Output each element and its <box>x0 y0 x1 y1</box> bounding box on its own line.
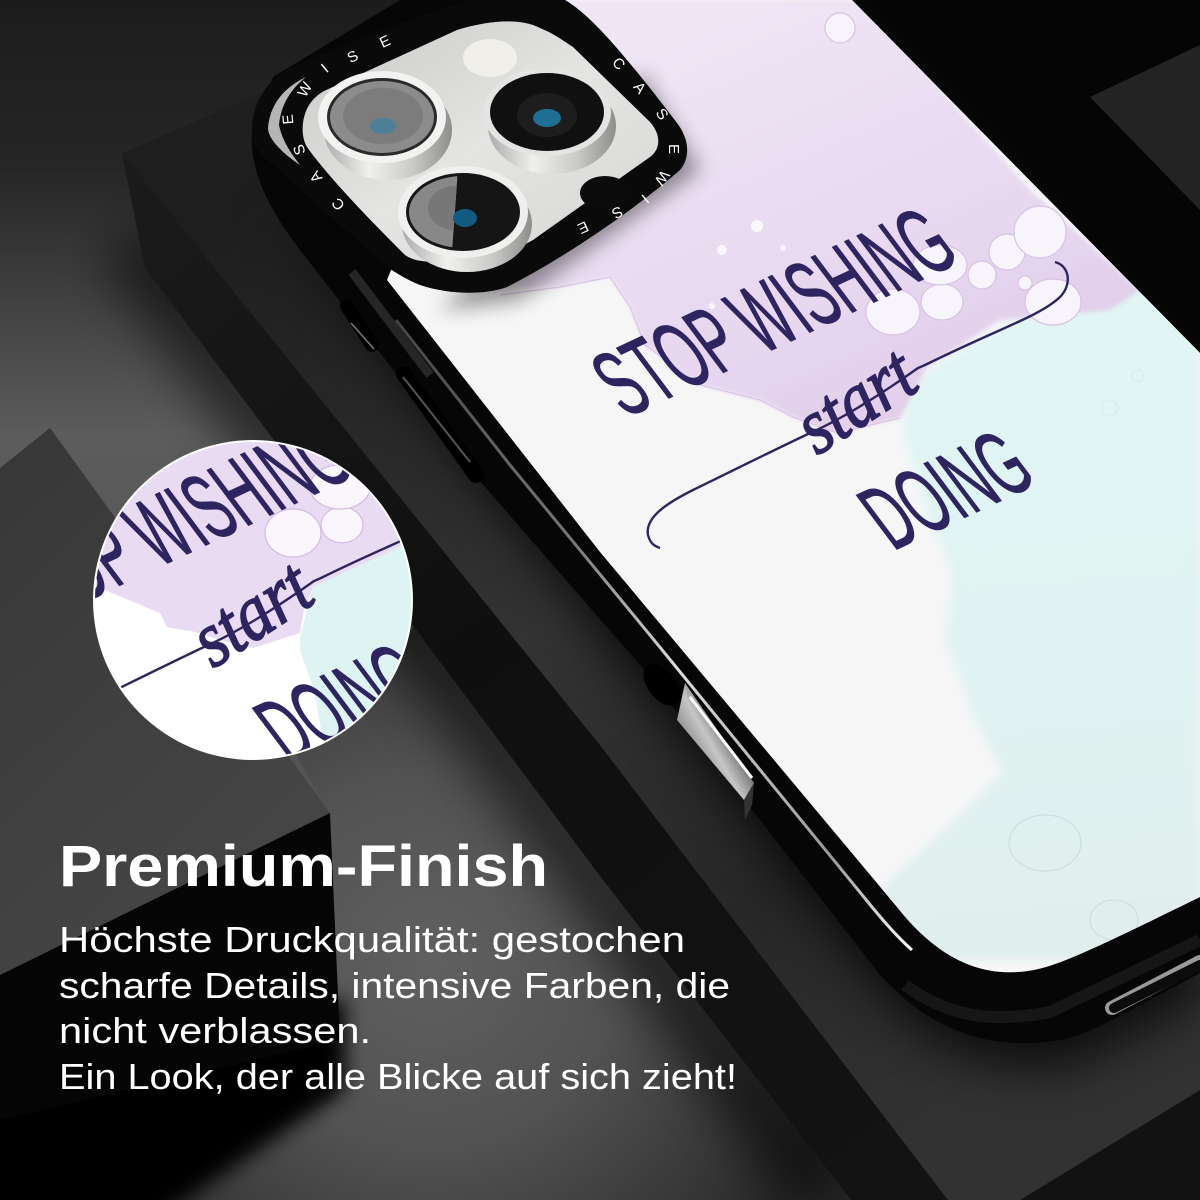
printed text: start: start <box>779 328 933 471</box>
brand lettering: left side: A <box>306 168 326 186</box>
lilac watercolor area <box>480 0 1140 433</box>
small white specks <box>709 220 786 309</box>
brand lettering: right side: S <box>652 105 672 123</box>
brand lettering: left side: W <box>294 79 316 100</box>
white paint bubbles <box>825 13 1081 335</box>
background: upper-right dark area <box>700 0 1200 420</box>
brand lettering: right side: C <box>608 54 628 74</box>
magnified bubbles <box>265 465 370 557</box>
glare on ring <box>268 77 306 165</box>
magnifier detail circle <box>93 440 413 760</box>
microphone hole <box>580 176 630 210</box>
background: lower-left block soft shadow <box>0 1000 345 1200</box>
upper side rim <box>352 272 430 375</box>
brand lettering: left side: I <box>318 61 332 76</box>
printed text: dOing: DOING <box>840 411 1052 568</box>
glossy edge highlight <box>396 320 912 950</box>
phone case body <box>252 0 1200 1043</box>
background: main block side face <box>122 153 948 1200</box>
title: Premium-Finish <box>59 834 548 899</box>
camera ring outer <box>252 0 687 293</box>
background: upper-right block <box>1090 45 1200 210</box>
printed swash line <box>648 262 1068 548</box>
faint water rings <box>1009 370 1144 940</box>
body inner rim <box>905 940 1200 1017</box>
background: shadow along main block <box>130 240 830 1200</box>
lilac wash outline <box>500 277 900 433</box>
silver side button <box>636 657 754 820</box>
lens 3 <box>398 166 532 272</box>
brand lettering: right side: W <box>650 167 673 189</box>
magnified swash <box>120 540 400 688</box>
body text: scharfe Details, intensive Farben, die <box>59 965 730 1006</box>
bottom port <box>1112 962 1200 1008</box>
lens 1 <box>318 71 452 180</box>
brand lettering: right side: A <box>630 79 649 97</box>
body text: Höchste Druckqualität: gestochen <box>59 919 685 960</box>
volume button lower <box>403 374 476 475</box>
body text <box>59 919 737 1097</box>
background: lower-left block top face <box>0 428 330 975</box>
magnified lilac area <box>96 442 402 648</box>
lens 2 <box>483 68 616 174</box>
brand lettering: left side: S <box>290 142 309 157</box>
camera window <box>303 21 658 264</box>
body text: Ein Look, der alle Blicke auf sich zieht! <box>59 1056 737 1097</box>
magnified mint area <box>300 546 411 742</box>
brand lettering: right side: E <box>665 144 682 154</box>
brand lettering: left side: S <box>344 47 361 67</box>
brand lettering: right side: I <box>638 191 652 206</box>
magnified text: dOing: DOING <box>236 624 448 781</box>
phone shadow <box>262 200 1200 1067</box>
screen printed design background <box>387 0 1200 972</box>
camera ring shadow <box>440 70 700 310</box>
body text: nicht verblassen. <box>59 1010 371 1051</box>
background: lit floor patch <box>150 627 851 1200</box>
camera module <box>252 0 687 293</box>
brand lettering: right side: E <box>575 217 591 237</box>
background: lower-left block front face <box>0 813 340 1120</box>
background: lower-right dark block <box>1020 1090 1200 1200</box>
brand lettering: left side: C <box>328 194 349 214</box>
volume button upper <box>347 306 374 349</box>
brand lettering: left side: E <box>280 114 297 125</box>
brand lettering: right side <box>575 54 682 237</box>
brand lettering: left side <box>280 32 393 214</box>
brand lettering: right side: S <box>609 202 625 222</box>
magnified text: start: start <box>175 541 329 684</box>
flash <box>463 39 517 77</box>
brand lettering: left side: E <box>377 32 393 52</box>
mint watercolor area <box>880 282 1200 964</box>
